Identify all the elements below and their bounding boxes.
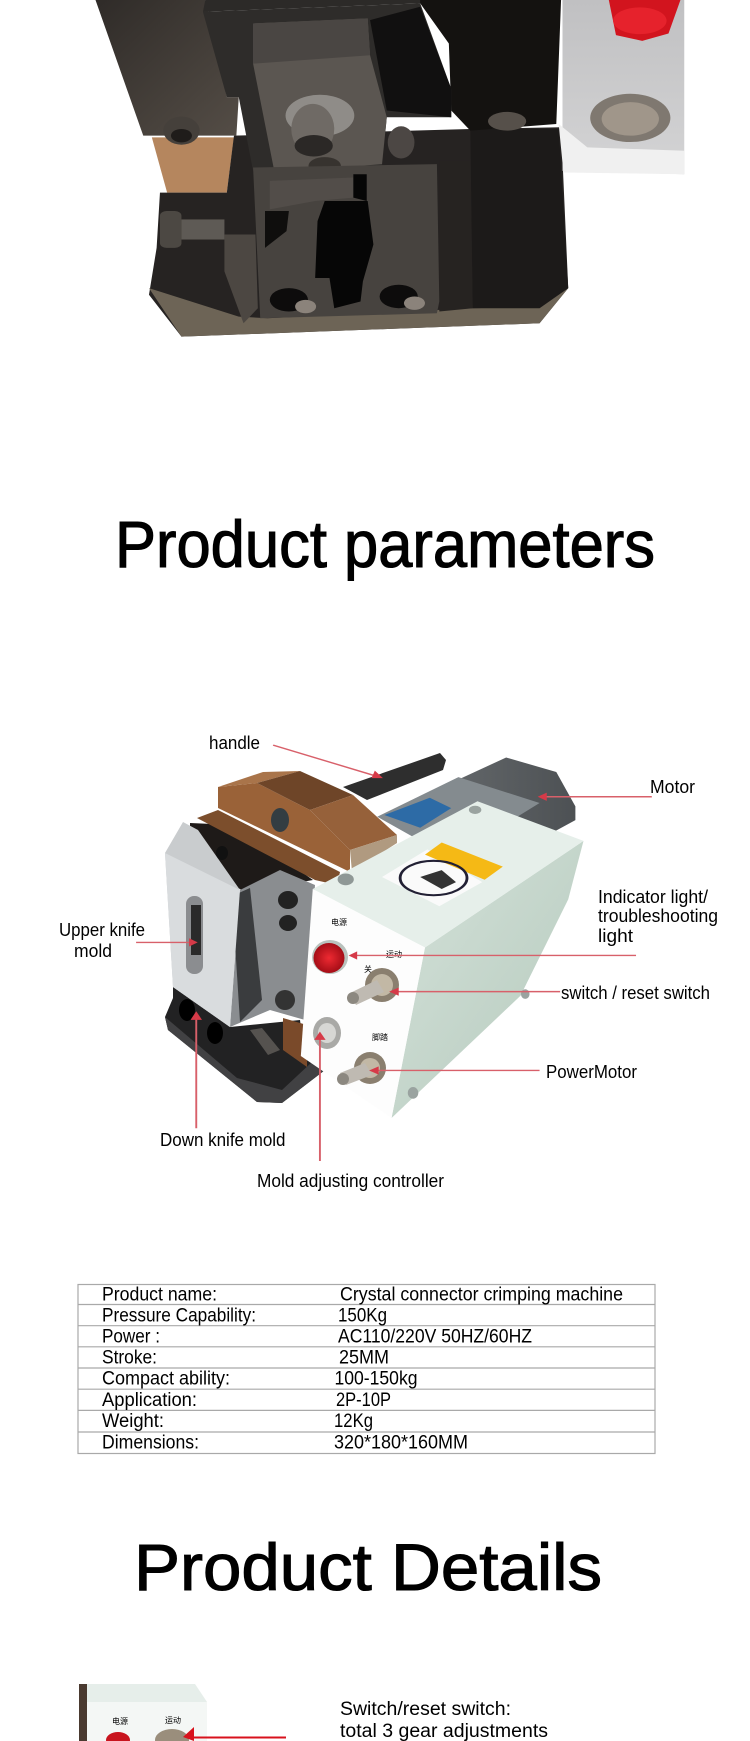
upper mid block <box>203 0 420 12</box>
hex bolt <box>286 95 354 175</box>
row: pressure capability: 150Kg <box>338 1306 387 1326</box>
label: upper knife mold <box>59 920 145 961</box>
row: compact ability: Compact ability: <box>102 1368 230 1390</box>
photo: labelled crimping machine <box>136 745 652 1161</box>
row: pressure capability <box>102 1306 387 1326</box>
label: upper knife mold: Upper knife <box>59 920 145 940</box>
guard screws <box>275 891 298 1010</box>
dark plate behind guard <box>190 823 313 892</box>
left bronze plate <box>96 0 239 136</box>
row: dimensions: Dimensions: <box>102 1432 199 1454</box>
label: mold adjusting controller: Mold adjusting controller <box>257 1171 444 1191</box>
photo: crimping die close-up <box>96 0 684 337</box>
row: dimensions <box>102 1432 468 1454</box>
row: application: 2P-10P <box>336 1390 391 1411</box>
toggle switch: reset <box>347 968 399 1005</box>
panel text: 运动 <box>386 949 402 959</box>
label: handle: handle <box>209 733 260 753</box>
label: indicator light: troubleshooting <box>598 906 718 926</box>
label: indicator light <box>598 887 718 946</box>
control box corner <box>559 0 684 174</box>
label: indicator light: light <box>598 926 633 946</box>
arrows <box>136 745 652 1161</box>
left adjusting screw <box>160 211 224 248</box>
slider block <box>253 18 387 173</box>
panel text: 电源 <box>331 917 347 927</box>
label: down knife mold: Down knife mold <box>160 1130 286 1150</box>
row: application <box>102 1390 391 1411</box>
row: product name <box>102 1284 623 1306</box>
heading: Product parameters: Product parameters <box>115 507 655 581</box>
row: power <box>102 1326 532 1348</box>
panel captions: 运动 <box>165 1715 181 1725</box>
row: stroke: 25MM <box>339 1348 389 1368</box>
text: switch description: Switch/reset switch: <box>340 1699 511 1720</box>
row: product name: Crystal connector crimping machine <box>340 1284 623 1306</box>
row: weight: 12Kg <box>334 1411 373 1432</box>
red light <box>106 1732 130 1741</box>
row: pressure capability: Pressure Capability: <box>102 1306 256 1326</box>
lower die block <box>253 164 439 318</box>
motor <box>377 758 575 844</box>
panel text: 关 <box>364 964 372 974</box>
panel captions <box>112 1715 181 1726</box>
black base <box>165 987 325 1103</box>
control panel top face <box>79 1684 207 1741</box>
row: stroke: Stroke: <box>102 1348 157 1368</box>
guard top knob <box>216 846 228 860</box>
label: switch / reset switch: switch / reset switch <box>561 983 710 1003</box>
row: power: AC110/220V 50HZ/60HZ <box>338 1326 532 1348</box>
row: weight: Weight: <box>102 1411 164 1432</box>
label: upper knife mold: mold <box>74 941 112 961</box>
toggle switch: power <box>337 1052 386 1085</box>
top dark column <box>418 0 561 131</box>
base bevel <box>149 288 568 337</box>
row: stroke <box>102 1348 389 1368</box>
base plate <box>149 127 568 337</box>
warning sticker <box>382 843 503 906</box>
right dark block <box>470 129 568 308</box>
socket holes <box>270 285 425 313</box>
table grid <box>78 1284 655 1454</box>
red arrow <box>183 1727 286 1741</box>
row: weight <box>102 1411 373 1432</box>
panel captions: 电源 <box>112 1716 128 1726</box>
table: specifications <box>78 1284 655 1454</box>
knife slot <box>315 201 373 308</box>
small screws <box>163 112 526 158</box>
heading: Product Details: Product Details <box>134 1530 602 1604</box>
red indicator light <box>312 940 348 974</box>
photo: switch detail <box>79 1684 286 1741</box>
panel text <box>331 917 402 1042</box>
copper block <box>152 137 234 193</box>
row: compact ability <box>102 1368 418 1390</box>
panel left edge <box>79 1684 87 1741</box>
mold adjust button <box>313 1017 341 1049</box>
side post <box>224 234 258 323</box>
toggle switch <box>155 1729 189 1741</box>
panel upper shading <box>87 1684 207 1702</box>
label: PowerMotor: PowerMotor <box>546 1062 637 1082</box>
copper head <box>197 771 397 885</box>
control box <box>301 801 584 1118</box>
label: indicator light: Indicator light/ <box>598 887 708 907</box>
row: dimensions: 320*180*160MM <box>334 1432 468 1454</box>
row: power: Power : <box>102 1326 160 1348</box>
text: switch description <box>340 1699 548 1741</box>
dark channel beside slider <box>370 7 451 117</box>
row: product name: Product name: <box>102 1284 217 1306</box>
row: compact ability: 100-150kg <box>334 1368 418 1390</box>
label: Motor: Motor <box>650 777 695 797</box>
panel text: 脚踏 <box>372 1032 388 1042</box>
acrylic guard <box>165 822 315 1027</box>
row: application: Application: <box>102 1390 197 1411</box>
handle <box>343 753 446 800</box>
